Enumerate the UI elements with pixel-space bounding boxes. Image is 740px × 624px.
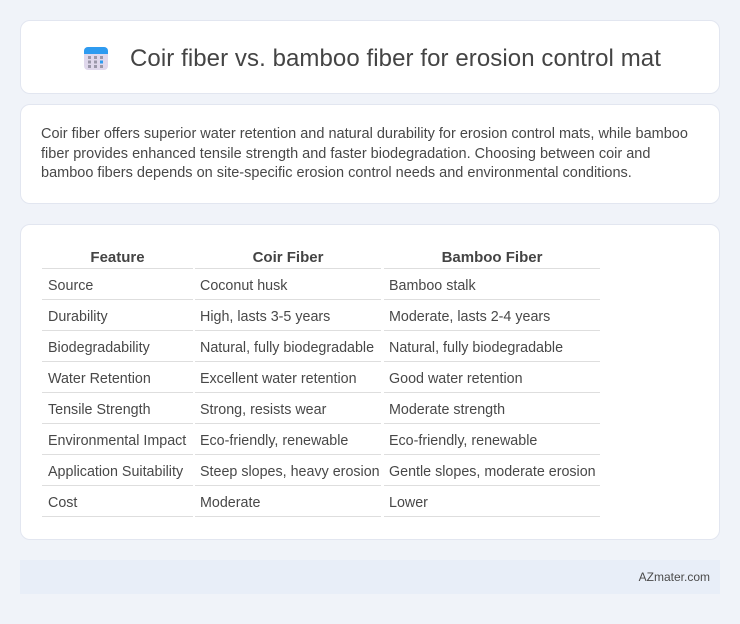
icon: calendar [84, 47, 108, 70]
title: Coir fiber vs. bamboo fiber for erosion control mat [130, 45, 661, 72]
table [42, 249, 600, 517]
row: Source: Coconut husk [200, 278, 287, 294]
column headings: Bamboo Fiber [442, 249, 542, 266]
row: Biodegradability: Biodegradability [48, 340, 150, 356]
row: Environmental Impact: Eco-friendly, renewable [389, 433, 537, 449]
row: Environmental Impact [48, 433, 537, 449]
row: Durability: High, lasts 3-5 years [200, 309, 330, 325]
column headings: Coir Fiber [253, 249, 323, 266]
intro text: fiber provides enhanced tensile strength and faster biodegradation. Choosing between coir and [41, 146, 650, 162]
row: Water Retention: Good water retention [389, 371, 523, 387]
row: Water Retention [48, 371, 523, 387]
row: Tensile Strength [48, 402, 505, 418]
footer bar [20, 560, 720, 594]
row: Durability: Moderate, lasts 2-4 years [389, 309, 550, 325]
row: Source: Source [48, 278, 93, 294]
row: Biodegradability [48, 340, 563, 356]
column headings [90, 249, 542, 266]
row: Durability: Durability [48, 309, 108, 325]
row: Source: Bamboo stalk [389, 278, 476, 294]
row: Environmental Impact: Eco-friendly, renewable [200, 433, 348, 449]
row: Source [48, 278, 476, 294]
intro text panel [20, 104, 720, 204]
row: Biodegradability: Natural, fully biodegradable [200, 340, 374, 356]
row: Tensile Strength: Strong, resists wear [200, 402, 326, 418]
row: Application Suitability: Gentle slopes, moderate erosion [389, 464, 596, 480]
row: Tensile Strength: Moderate strength [389, 402, 505, 418]
row: Tensile Strength: Tensile Strength [48, 402, 151, 418]
row: Cost: Moderate [200, 495, 260, 511]
column headings: Feature [90, 249, 145, 266]
title card [20, 20, 720, 94]
row: Cost [48, 495, 428, 511]
row: Water Retention: Water Retention [48, 371, 151, 387]
row: Durability [48, 309, 550, 325]
row: Water Retention: Excellent water retention [200, 371, 357, 387]
intro text: bamboo fibers depends on site-specific erosion control needs and environmental conditions. [41, 165, 632, 181]
footer source text: AZmater.com [639, 570, 710, 584]
row: Application Suitability: Application Suitability [48, 464, 183, 480]
row: Environmental Impact: Environmental Impact [48, 433, 186, 449]
row: Application Suitability [48, 464, 596, 480]
intro text: Coir fiber offers superior water retention and natural durability for erosion control mats, while bamboo [41, 126, 688, 142]
row: Biodegradability: Natural, fully biodegradable [389, 340, 563, 356]
row: Cost: Lower [389, 495, 428, 511]
comparison table panel [20, 224, 720, 540]
row: Cost: Cost [48, 495, 77, 511]
intro text [41, 126, 688, 181]
row: Application Suitability: Steep slopes, heavy erosion [200, 464, 380, 480]
